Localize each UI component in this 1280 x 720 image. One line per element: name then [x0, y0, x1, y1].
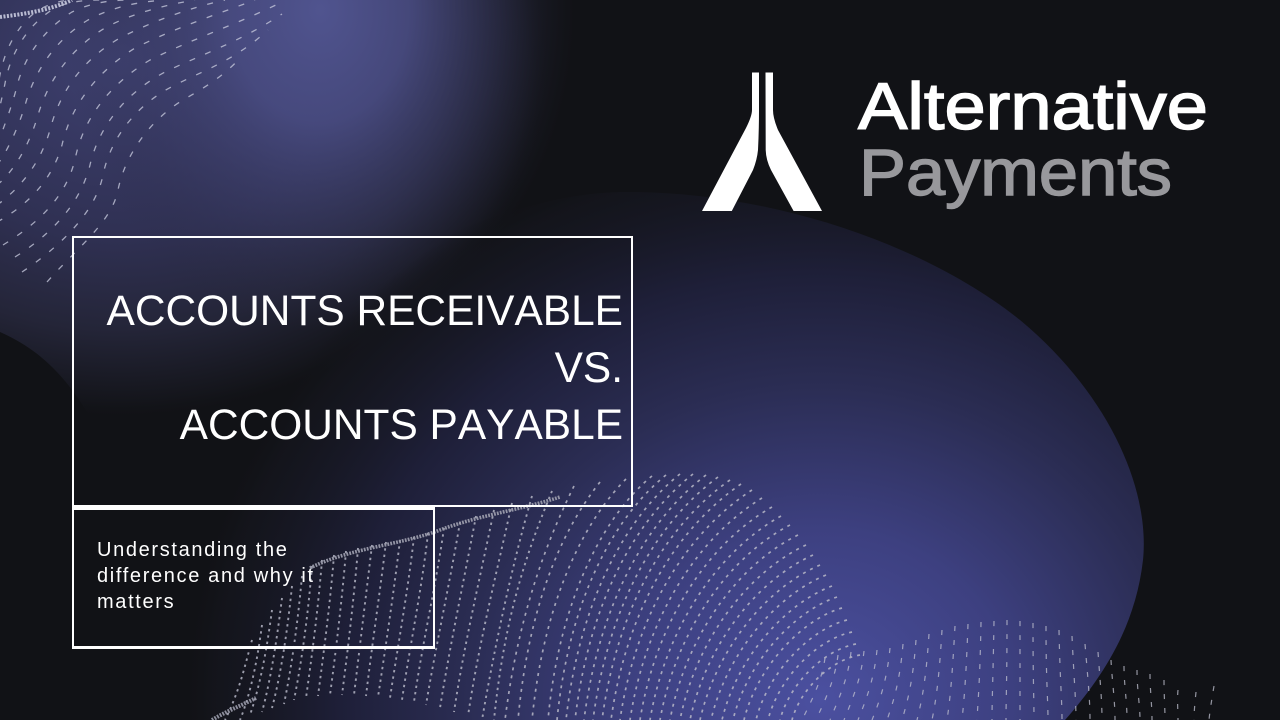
- subtitle: Understanding the: [97, 539, 288, 561]
- title: ACCOUNTS PAYABLE: [180, 401, 623, 448]
- large gradient blob: [140, 192, 1144, 720]
- centre wave bright edge: [310, 497, 560, 568]
- title: [106, 287, 623, 448]
- subtitle box: [72, 507, 435, 649]
- title: VS.: [555, 344, 623, 391]
- subtitle: matters: [97, 591, 175, 613]
- title box: [72, 236, 633, 507]
- subtitle: difference and why it: [97, 565, 315, 587]
- centre wave lower-left bright tip: [212, 698, 256, 720]
- subtitle: [97, 539, 315, 613]
- top-left dotted wave: [0, 0, 282, 282]
- top-left gradient blob: [0, 0, 700, 480]
- logo wordmark: Alternative: Alternative: [858, 69, 1208, 143]
- title: ACCOUNTS RECEIVABLE: [107, 287, 623, 334]
- top-left blob highlight: [0, 0, 600, 340]
- centre wave right-hand rows: [505, 474, 860, 720]
- logo mark: [702, 72, 822, 211]
- logo: [702, 69, 1208, 211]
- centre dotted wave: [225, 491, 552, 720]
- top-left bright band: [0, 0, 72, 17]
- bottom-right dotted wave: [802, 620, 1214, 720]
- logo wordmark: Payments: Payments: [859, 135, 1172, 209]
